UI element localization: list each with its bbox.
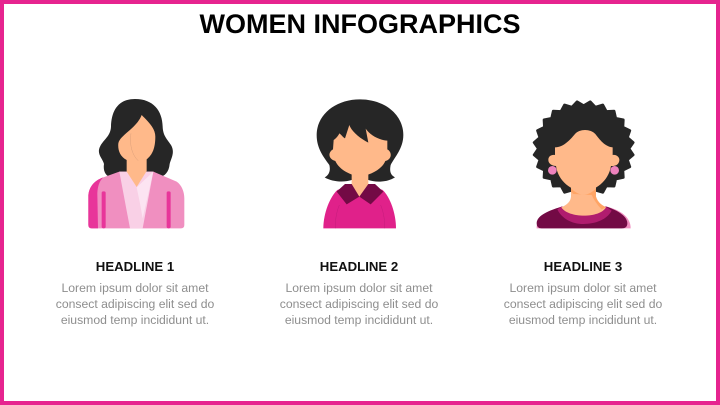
text block 2: eiusmod temp incididunt ut. [285,313,433,327]
text block 3: HEADLINE 3 [544,259,622,274]
text block 1: eiusmod temp incididunt ut. [61,313,209,327]
text block 3: consect adipiscing elit sed do [504,297,662,311]
text block 2 [280,259,438,327]
text block 3: Lorem ipsum dolor sit amet [510,281,656,295]
text block 1: HEADLINE 1 [96,259,174,274]
icon: woman 2 [317,99,403,228]
text block 2: Lorem ipsum dolor sit amet [286,281,432,295]
icon: woman 3 [534,102,633,228]
title: WOMEN INFOGRAPHICS [200,9,520,39]
text block 1: Lorem ipsum dolor sit amet [62,281,208,295]
text block 1: consect adipiscing elit sed do [56,297,214,311]
text block 1 [56,259,214,327]
text block 3: eiusmod temp incididunt ut. [509,313,657,327]
icon: woman 1 [88,99,184,228]
text block 2: HEADLINE 2 [320,259,398,274]
text block 3 [504,259,662,327]
text block 2: consect adipiscing elit sed do [280,297,438,311]
